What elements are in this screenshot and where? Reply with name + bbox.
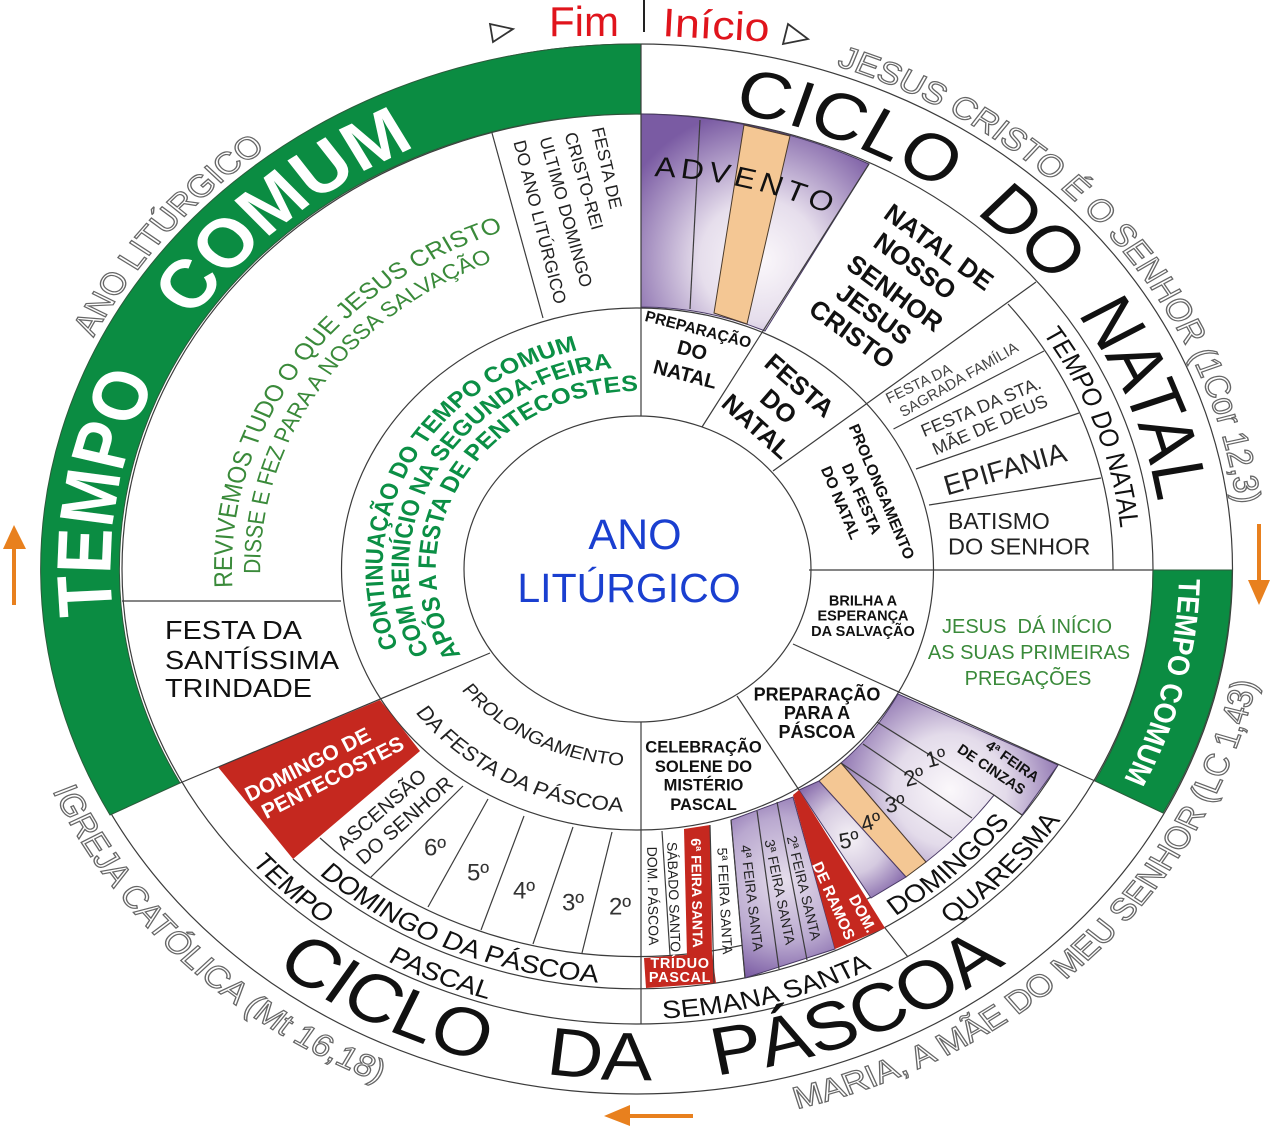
text: festa da santissima trindade [165, 615, 340, 703]
label: domingos: DOMINGOS [886, 814, 1008, 915]
labels: quarta feira de cinzas: DE CINZAS [954, 742, 1028, 799]
labels: domingo de ramos: DE RAMOS [808, 859, 858, 943]
labels: holy week days: 6ª FEIRA SANTA [688, 838, 706, 948]
arrow: left bottom [604, 1105, 693, 1126]
labels: sundays of easter: 5º [467, 860, 489, 886]
text: festa da santissima trindade: FESTA DA [165, 615, 303, 645]
text: festa do natal [716, 349, 839, 465]
label: domingo de pentecostes: PENTECOSTES [258, 732, 408, 824]
text: jesus da inicio: AS SUAS PRIMEIRAS [928, 642, 1130, 664]
labels: lent sundays: 3º [883, 790, 907, 818]
text: ascensao do senhor: ASCENSÃO [332, 764, 431, 855]
text: preparacao do natal [643, 307, 753, 394]
text: festa da santissima trindade: SANTÍSSIMA [165, 645, 340, 675]
text: preparacao para a pascoa: PÁSCOA [778, 721, 856, 742]
panel: triduo pascal red block [644, 953, 716, 988]
heading: tempo comum: TEMPO [57, 372, 148, 618]
text: preparacao do natal: DO [675, 337, 709, 365]
outlined text: maria: MARIA, A MÃE DO MEU SENHOR (LC 1,43) [792, 681, 1263, 1110]
text: preparacao para a pascoa [754, 684, 880, 742]
outlined text: jesus cristo: JESUS CRISTO É O SENHOR (1Cor 12,3) [838, 47, 1262, 502]
label: inicio: Início [662, 1, 771, 51]
labels: holy week days: 3ª FEIRA SANTA [762, 838, 799, 947]
labels: domingo de ramos [808, 859, 879, 943]
text: natal de nosso senhor: NOSSO [868, 226, 962, 306]
arrow: down right [1248, 524, 1270, 605]
label: semana santa: SEMANA SANTA [664, 956, 872, 1018]
text: batismo do senhor [948, 508, 1090, 560]
labels: lent sundays: 2º [901, 762, 927, 792]
text: festa de cristo-rei: FESTA DE [588, 125, 626, 211]
text: continuacao line 1: CONTINUAÇÃO DO TEMPO COMUM [365, 336, 576, 650]
labels: holy week days: DOM. PÁSCOA [644, 846, 662, 946]
text: ascensao do senhor: DO SENHOR [352, 773, 458, 869]
text: celebracao solene: MISTÉRIO [664, 776, 744, 794]
arrow: up left [3, 525, 26, 605]
text: preparacao para a pascoa: PREPARAÇÃO [754, 684, 880, 704]
labels: holy week days: SÁBADO SANTO [664, 842, 684, 952]
text: celebracao solene [645, 736, 762, 814]
label: prolongamento: PROLONGAMENTO [462, 683, 623, 766]
heading: tempo comum: COMUM [160, 107, 412, 308]
text: natal de nosso senhor: NATAL DE [879, 198, 999, 296]
label: tempo: TEMPO [256, 852, 332, 920]
text: festa de cristo-rei: DO ANO LITÚRGICO [510, 138, 571, 306]
labels: domingo de ramos: DOM. [845, 892, 879, 936]
labels: lent sundays [837, 743, 949, 854]
text: celebracao solene: PASCAL [670, 796, 737, 814]
label: tempo do natal: TEMPO DO NATAL [1046, 325, 1138, 528]
labels: sundays of easter [424, 834, 631, 920]
panel: advento purple wedge [641, 114, 869, 331]
text: natal de nosso senhor: CRISTO [804, 293, 900, 375]
labels: holy week days: 2ª FEIRA SANTA [784, 834, 824, 942]
text: festa do natal: DO [754, 384, 802, 430]
text: brilha a esperanca: DA SALVAÇÃO [811, 622, 915, 640]
labels: lent sundays: 1º [923, 743, 949, 773]
text: jesus da inicio: JESUS DÁ INÍCIO [942, 615, 1112, 638]
text: festa do natal: NATAL [716, 389, 796, 465]
outlined text: igreja catolica: IGREJA CATÓLICA (Mt 16,18) [52, 784, 384, 1086]
text: prolongamento da festa do natal: PROLONGAMENTO [845, 422, 917, 562]
radial dividers [122, 44, 1153, 1024]
labels: sundays of easter: 4º [513, 878, 535, 904]
divider: start end tick [643, 0, 645, 32]
labels: lent sundays: 4º [858, 807, 884, 837]
icon: left triangle [490, 24, 513, 42]
title: ano liturgico: ANO [588, 511, 682, 559]
text: festa da sta mae de deus: FESTA DA STA. [918, 373, 1044, 441]
text: festa da santissima trindade: TRINDADE [165, 673, 312, 703]
text: prolongamento da festa do natal: DO NATAL [817, 464, 863, 542]
labels: holy week days: 4ª FEIRA SANTA [738, 844, 767, 953]
text: batismo do senhor: DO SENHOR [948, 534, 1090, 560]
text: festa da sta mae de deus: MÃE DE DEUS [929, 390, 1051, 459]
heading: ciclo do natal: CICLO DO NATAL [742, 72, 1204, 500]
text: epifania: EPIFANIA [940, 437, 1070, 501]
title: ano liturgico: LITÚRGICO [517, 565, 741, 611]
icon: right triangle [783, 24, 808, 44]
label: triduo pascal [649, 955, 711, 986]
text: festa de cristo-rei [510, 125, 626, 306]
text: natal de nosso senhor [804, 198, 999, 375]
text: festa da sagrada familia: FESTA DA [883, 361, 955, 407]
panel: quaresma purple wedges [799, 694, 1058, 898]
labels: quarta feira de cinzas: 4ª FEIRA [982, 738, 1042, 786]
text: jesus da inicio: PREGAÇÕES [965, 666, 1091, 690]
text: preparacao do natal: NATAL [651, 356, 719, 394]
labels: holy week days [644, 834, 824, 955]
label: domingo de pentecostes: DOMINGO DE [241, 724, 375, 806]
text: disse e fez: DISSE E FEZ PARA A NOSSA SALVAÇÃO [244, 250, 490, 572]
text: festa de cristo-rei: ULTIMO DOMINGO [535, 135, 597, 289]
text: natal de nosso senhor: SENHOR [841, 248, 949, 338]
labels: sundays of easter: 6º [424, 834, 446, 862]
label: da festa da pascoa: DA FESTA DA PÁSCOA [416, 705, 623, 812]
label: pascal: PASCAL [390, 947, 488, 999]
panel: domingo de ramos red wedge [793, 790, 885, 949]
text: batismo do senhor: BATISMO [948, 508, 1050, 534]
text: festa da sagrada familia: SAGRADA FAMÍLIA [897, 339, 1021, 421]
text: jesus da inicio [928, 615, 1130, 690]
text: brilha a esperanca: BRILHA A [829, 594, 898, 610]
text: celebracao solene: CELEBRAÇÃO [645, 736, 762, 756]
text: preparacao do natal: PREPARAÇÃO [643, 307, 753, 352]
panel: semana santa purple wedges [731, 797, 835, 978]
labels: sundays of easter: 3º [562, 890, 584, 916]
panel: tempo comum green band right [1095, 570, 1232, 813]
text: festa de cristo-rei: CRISTO-REI [560, 130, 608, 232]
text: prolongamento da festa do natal: DA FESTA [838, 461, 884, 537]
label: triduo pascal: PASCAL [649, 970, 711, 986]
heading: ciclo da pascoa: CICLO DA PÁSCOA [286, 937, 1006, 1080]
text: brilha a esperanca: ESPERANÇA [817, 608, 909, 624]
panel: tempo comum green band left [41, 44, 641, 815]
text: natal de nosso senhor: JESUS [831, 277, 917, 351]
label: tempo comum right: TEMPO COMUM [1124, 580, 1200, 786]
text: celebracao solene: SOLENE DO [655, 758, 752, 776]
labels: lent sundays: 5º [837, 826, 861, 854]
panel: sexta feira santa red strip [684, 825, 712, 957]
text: revivemos: REVIVEMOS TUDO O QUE JESUS CRISTO [214, 218, 500, 586]
labels: holy week days: 5ª FEIRA SANTA [714, 847, 736, 955]
text: preparacao para a pascoa: PARA A [784, 703, 850, 723]
heading: tempo comum [57, 107, 412, 618]
labels: sundays of easter: 2º [609, 894, 631, 920]
label: domingo da pascoa: DOMINGO DA PÁSCOA [320, 862, 598, 983]
label: quaresma: QUARESMA [942, 816, 1061, 921]
label: advento: ADVENTO [654, 158, 832, 210]
title: ano liturgico [517, 511, 741, 611]
text: continuacao line 2: COM REINÍCIO NA SEGUNDA-FEIRA [388, 354, 612, 656]
text: brilha a esperanca [811, 594, 915, 640]
panel: domingo de pentecostes red block [218, 700, 420, 859]
outlined text: ano liturgico: ANO LITÚRGICO [76, 136, 261, 338]
text: continuacao line 3: APÓS A FESTA DE PENTECOSTES [418, 376, 637, 656]
text: festa do natal: FESTA [759, 349, 839, 423]
label: triduo pascal: TRÍDUO [650, 955, 710, 972]
